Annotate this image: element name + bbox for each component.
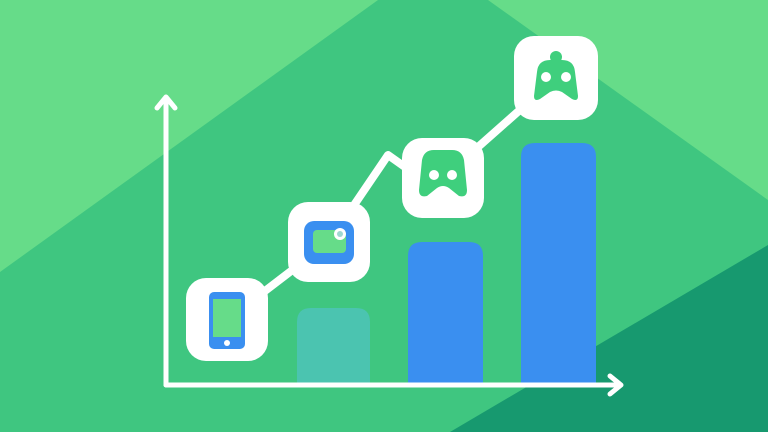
bar chart: [297, 143, 596, 383]
icon: game character: [514, 36, 598, 120]
icon: game controller: [402, 138, 484, 218]
axes: [157, 97, 621, 394]
icon: phone: [186, 278, 268, 361]
icon: camera/app: [288, 202, 370, 282]
trend line: [227, 78, 556, 320]
